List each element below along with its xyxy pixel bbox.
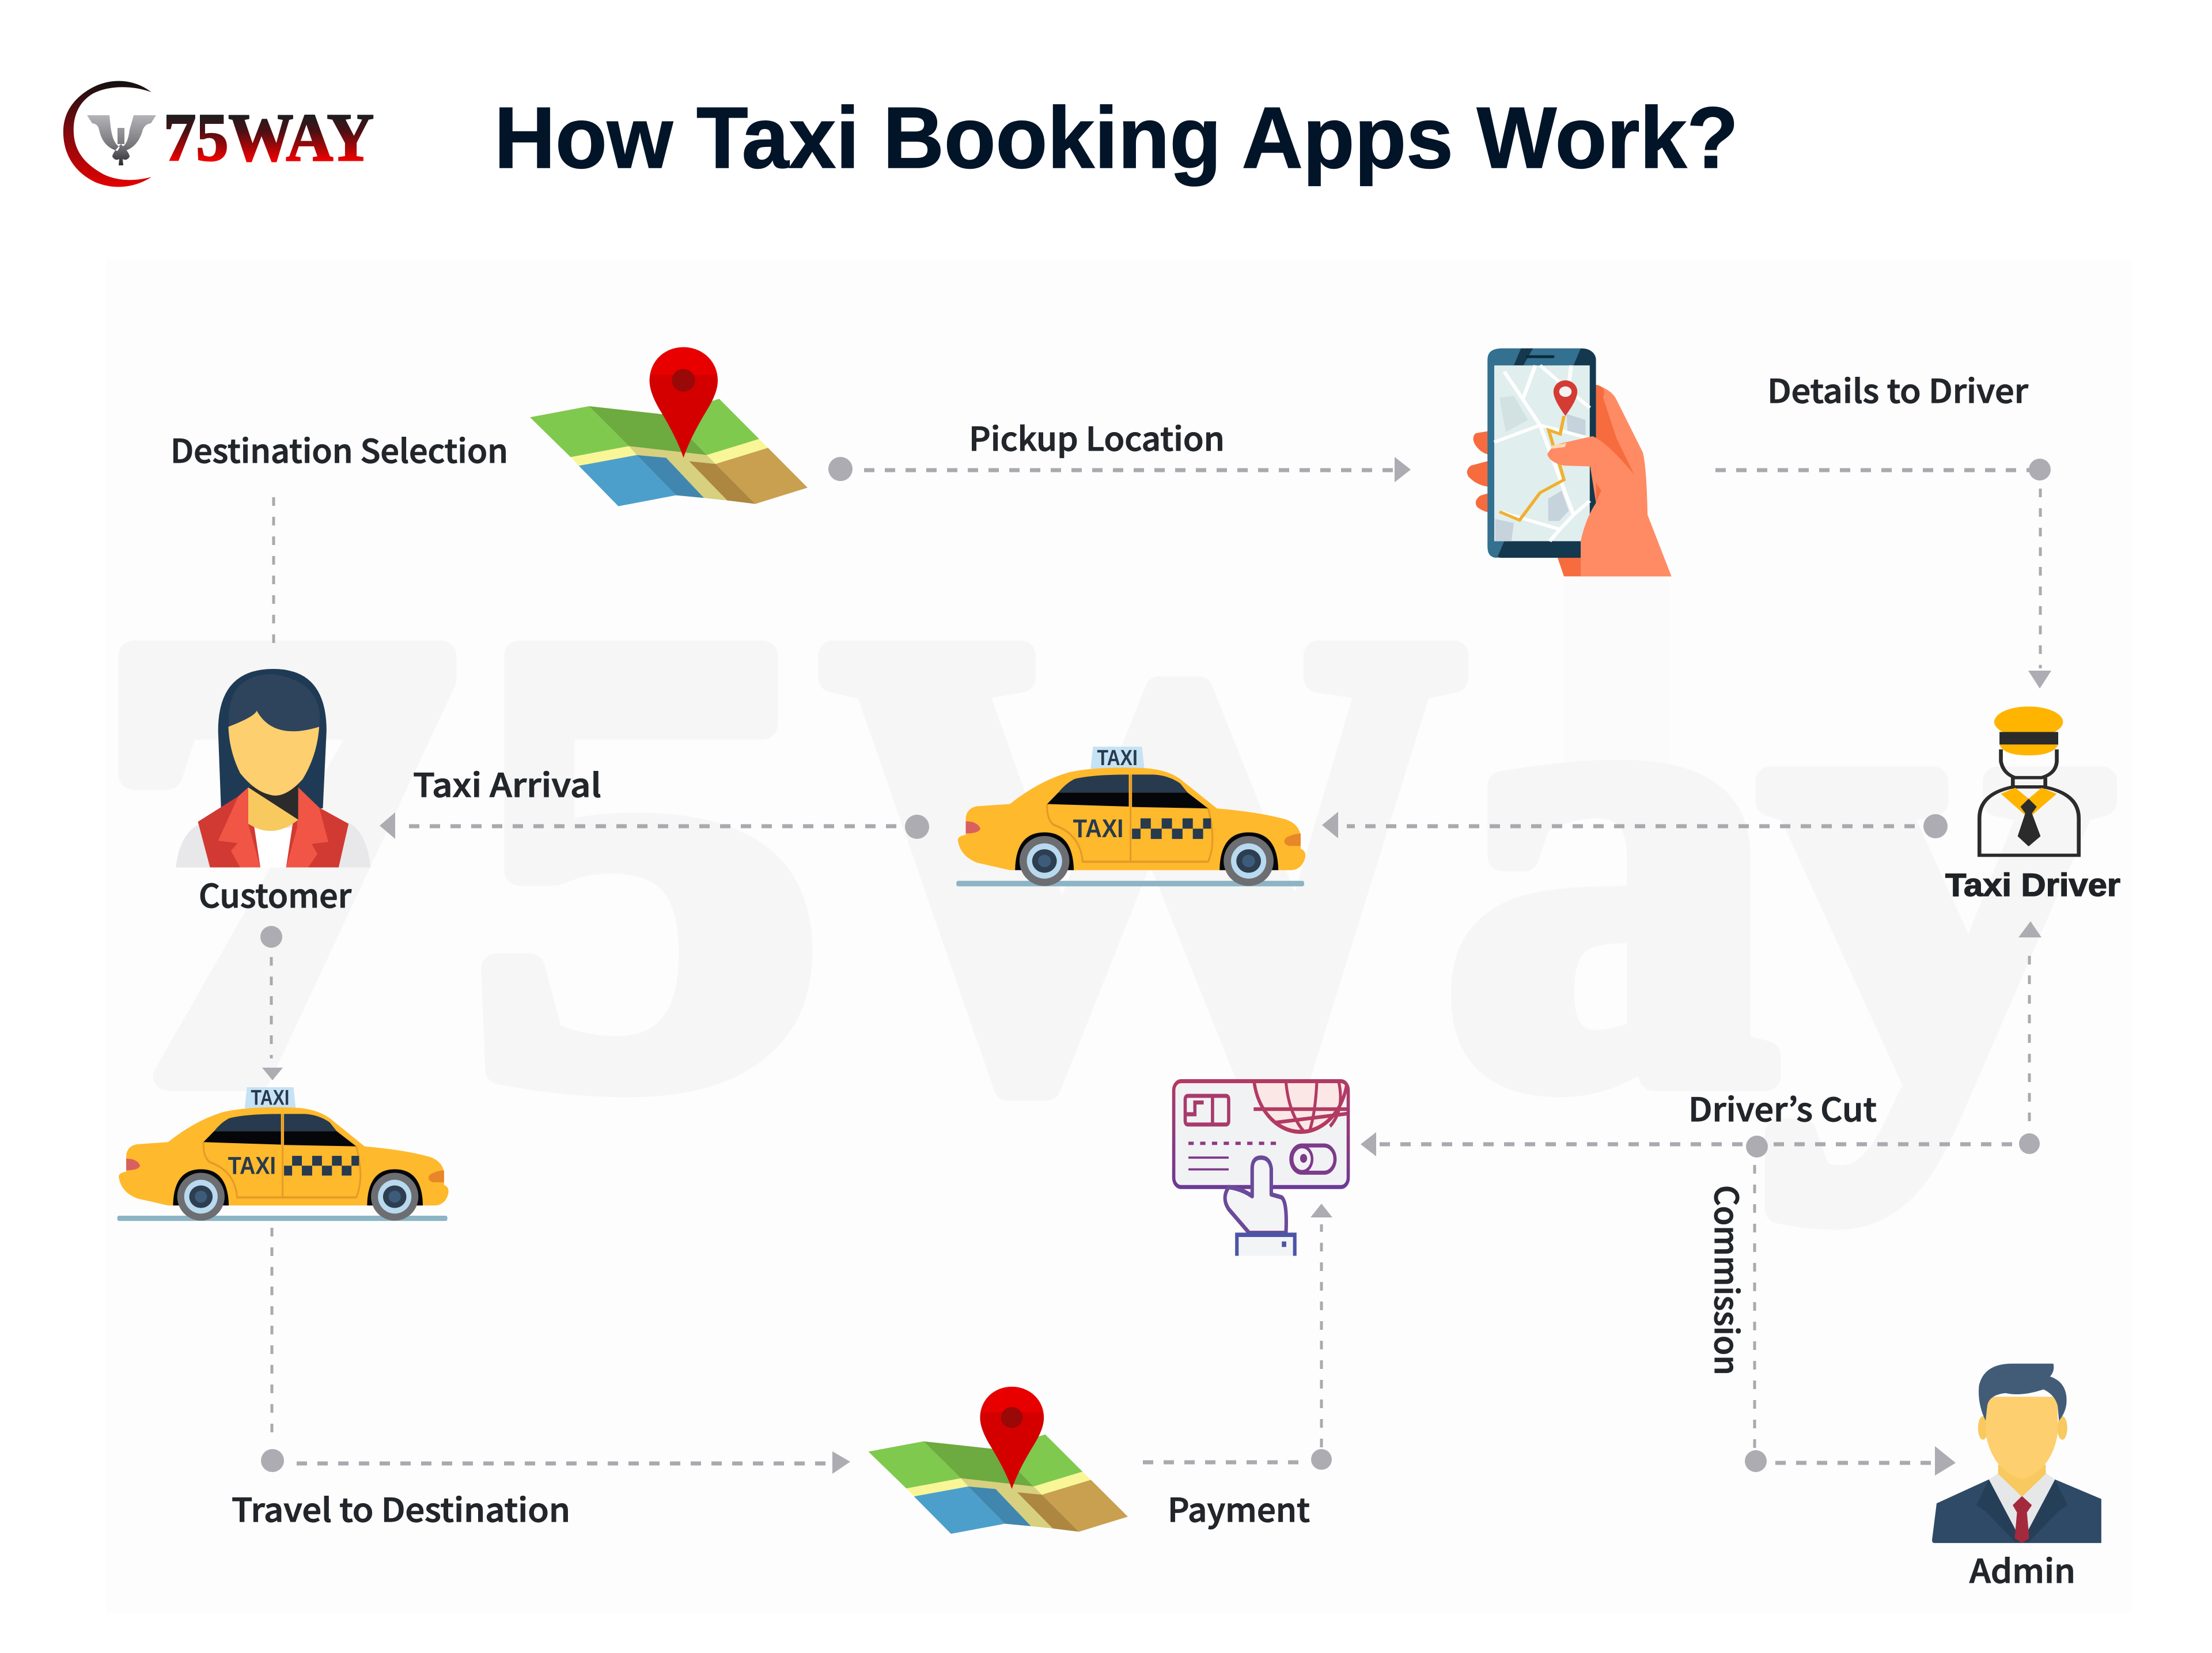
connector: driver's cut [1361,921,2041,1156]
background watermark: a [1445,504,1776,1216]
connector: destination selection to customer [272,497,275,651]
connector: commission to admin [1745,1136,1956,1476]
label: travel to destination: Travel to Destination [232,1485,570,1531]
label: destination selection: Destination Selection [171,426,508,472]
logo [63,81,374,187]
icon: taxi (left) [118,1086,449,1221]
background watermark [93,503,2108,1217]
connector: travel to destination [261,1228,850,1474]
icon: taxi (center) [956,746,1305,886]
icon: map with pin (destination) [530,347,808,506]
icon: map with pin (payment) [868,1387,1128,1534]
background watermark: W [824,504,1464,1216]
label: customer: Customer [199,871,352,917]
label: taxi driver: Taxi Driver [1945,867,2120,903]
label: taxi arrival: Taxi Arrival [413,760,601,807]
label: driver's cut: Driver’s Cut [1688,1084,1877,1131]
icon: admin [1932,1364,2101,1543]
icon: hand holding phone [1467,349,1672,576]
label: commission: Commission [1705,1185,1752,1375]
background watermark: 7 [93,504,457,1216]
label: payment: Payment [1168,1485,1310,1531]
icon: credit card and hand [1172,1079,1350,1256]
connector: pickup location [828,457,1411,482]
logo: 75WAY [164,100,374,175]
background watermark: 5 [469,503,822,1216]
connector: taxi arrival [380,812,929,839]
icon: taxi driver [1979,706,2079,855]
connector: driver to taxi [1322,812,1948,838]
connector: customer to taxi [260,926,283,1080]
icon: customer [176,669,370,867]
label: details to driver: Details to Driver [1767,366,2029,413]
connector: details to driver [1715,459,2051,689]
title: How Taxi Booking Apps Work? [494,89,1738,186]
label: pickup location: Pickup Location [969,414,1225,460]
background watermark: y [1764,503,2108,1217]
label: admin: Admin [1969,1546,2075,1593]
connector: payment [1143,1204,1332,1470]
